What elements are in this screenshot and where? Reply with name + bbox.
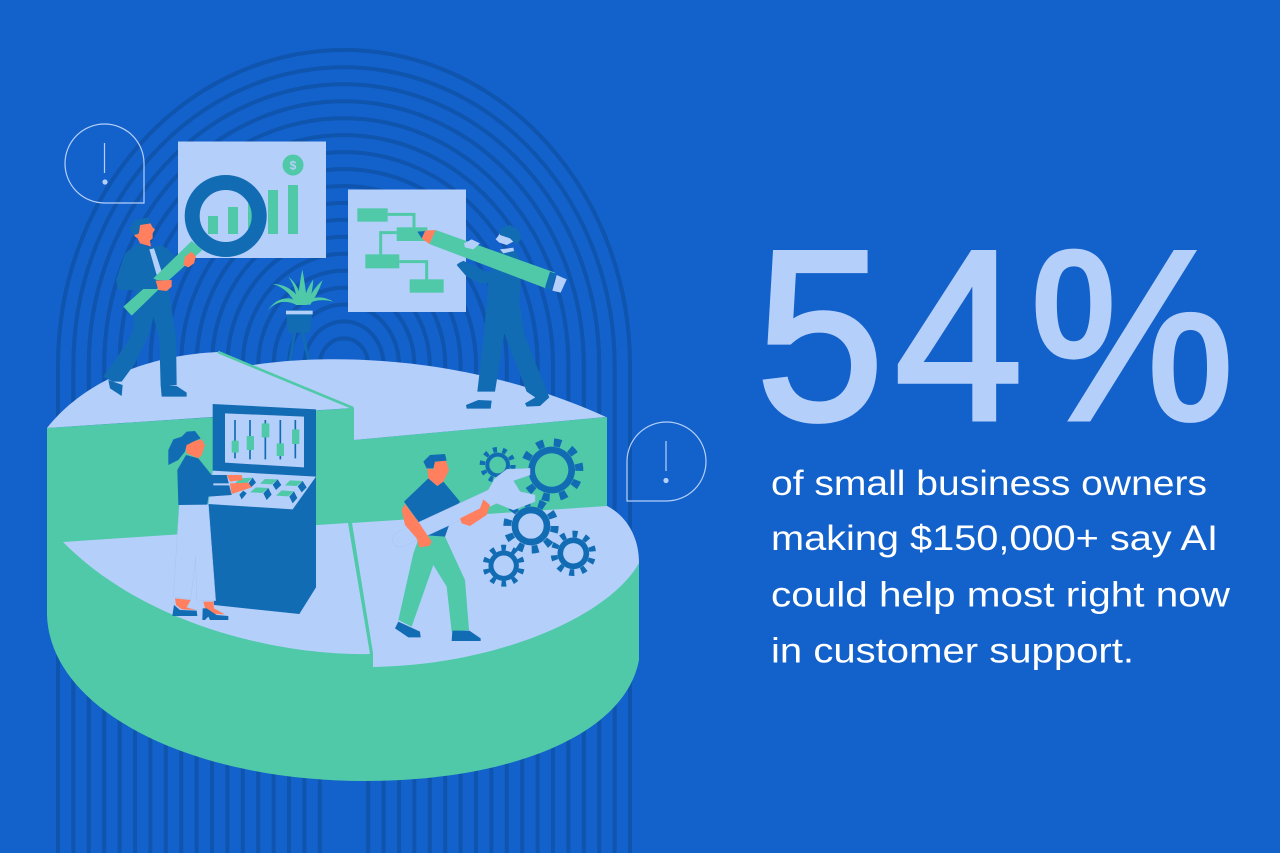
description text: making $150,000+ say AI [771,518,1218,558]
control machine [208,404,316,614]
alert bubble: right [627,422,706,501]
dollar badge [282,154,304,176]
woman at control machine [168,431,252,620]
flowchart panel [348,190,466,312]
description text: of small business owners [771,463,1207,503]
person with magnifying glass [103,217,202,397]
concentric arch pattern [58,50,630,853]
platform: lower left slice [63,523,370,654]
description text: could help most right now [771,574,1230,614]
description text [771,463,1230,670]
chart panel [178,142,326,258]
plant on stand [267,269,333,367]
magnifying glass ring [192,182,259,250]
platform: upper right slice [253,359,606,440]
gears [482,434,597,587]
person with giant pencil [417,225,567,409]
description text: in customer support. [771,630,1134,670]
big statistic: 54% [756,201,1234,471]
platform: upper left slice [47,352,353,428]
alert bubble: top left [65,124,144,203]
wrench [393,468,535,547]
platform: lower right slice [352,506,639,667]
machine screen with sliders [225,413,304,467]
platform: green body [47,408,639,781]
bar chart [208,185,298,234]
dollar badge: $ [290,158,297,172]
machine console keys [208,471,316,509]
flowchart boxes and connectors [357,208,444,293]
platform: green edge strip [218,352,353,408]
person with wrench [393,454,535,641]
